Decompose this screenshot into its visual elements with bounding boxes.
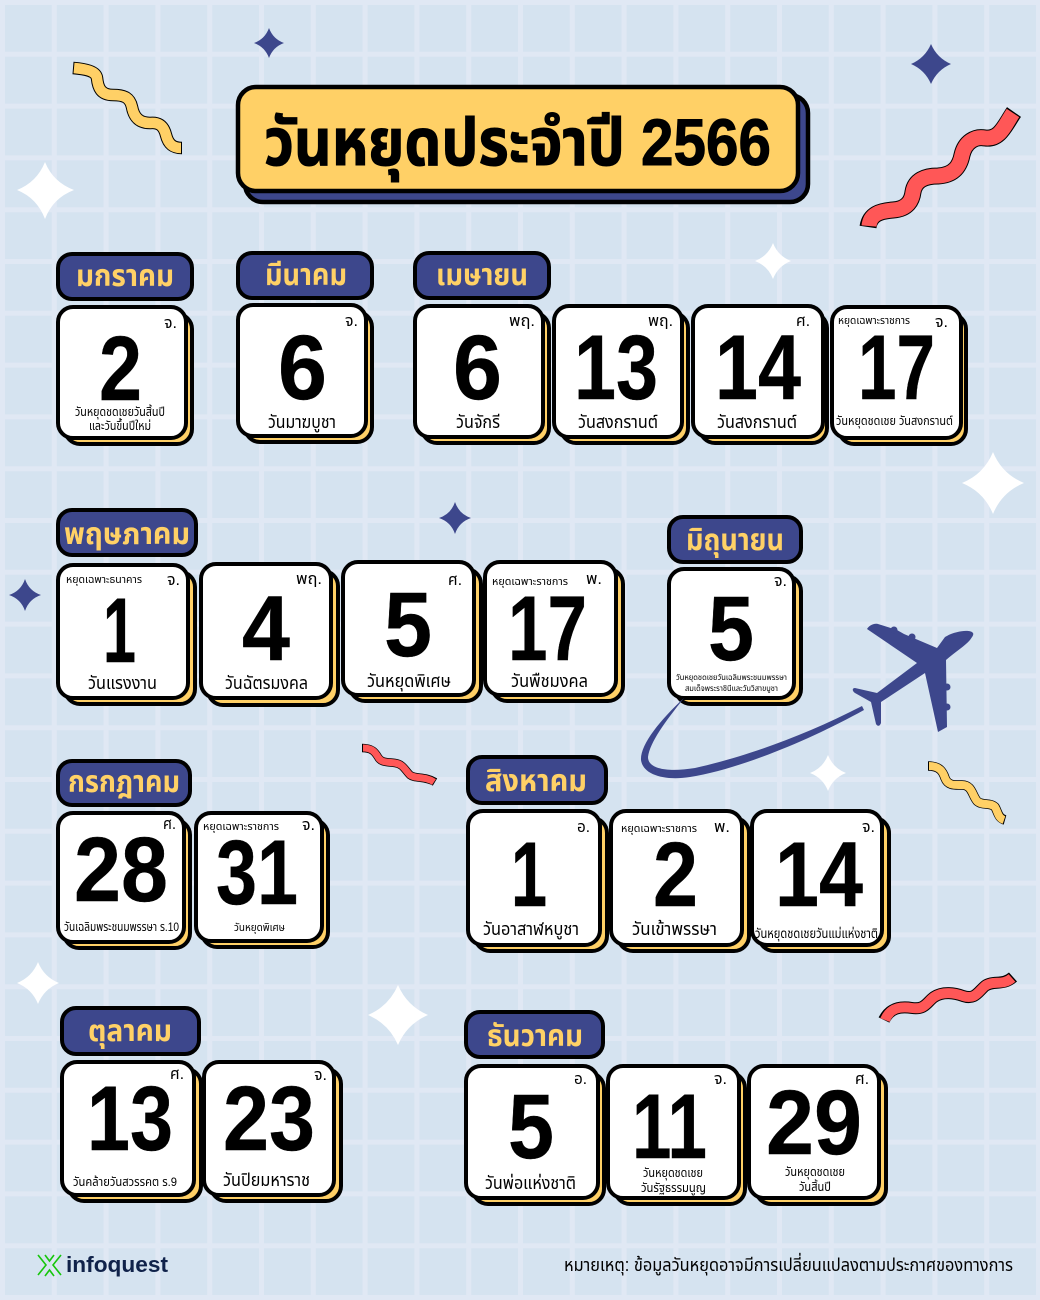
calendar card: 1 August [468, 811, 607, 951]
calendar card: 11 December [608, 1066, 745, 1204]
calendar card: 4 May: พฤ. [296, 571, 322, 588]
calendar card: 29 December: 29 [766, 1072, 862, 1174]
calendar card: 1 May: 1 [103, 580, 136, 682]
calendar card: 17 April: หยุดเฉพาะราชการ [838, 315, 910, 327]
calendar card: 11 December: 11 [632, 1076, 707, 1178]
calendar card: 13 October [62, 1062, 201, 1201]
calendar card: 14 August: วันหยุดชดเชยวันแม่แห่งชาติ [755, 926, 878, 941]
icon: white sparkle below plane [810, 755, 846, 791]
month label: เมษายน: เมษายน [436, 259, 528, 292]
calendar card: 11 December: วันหยุดชดเชย [643, 1166, 703, 1180]
calendar card: 31 July: วันหยุดพิเศษ [234, 922, 285, 934]
calendar card: 6 March: จ. [345, 313, 358, 330]
calendar card: 1 August: วันอาสาฬหบูชา [483, 919, 579, 941]
calendar card: 5 December: 5 [508, 1076, 554, 1178]
calendar card: 28 July: 28 [74, 819, 168, 921]
calendar card: 1 August: 1 [511, 824, 547, 926]
calendar card: 14 August: 14 [775, 824, 863, 926]
calendar card: 28 July: ศ. [163, 816, 176, 833]
calendar card: 17 May: หยุดเฉพาะราชการ [492, 576, 568, 588]
calendar card: 13 October: 13 [87, 1068, 173, 1170]
calendar card: 5 May: 5 [384, 574, 432, 676]
icon: plane flight trail [641, 698, 864, 778]
month label: มกราคม: มกราคม [76, 260, 174, 293]
calendar card: 1 May [58, 565, 195, 704]
month label: กรกฎาคม [58, 761, 190, 805]
icon: navy sparkle left [9, 579, 41, 611]
calendar card: 4 May: 4 [242, 578, 290, 680]
calendar card: 13 April: พฤ. [648, 313, 673, 330]
calendar card: 17 April: 17 [858, 317, 935, 419]
calendar card: 13 April [554, 306, 688, 443]
calendar card: 28 July: วันเฉลิมพระชนมพรรษา ร.10 [64, 920, 179, 934]
title: วันหยุดประจำปี 2566 [264, 105, 771, 182]
month label: ตุลาคม [62, 1008, 199, 1054]
calendar card: 11 December: จ. [714, 1071, 727, 1088]
logo: infoquest: infoquest [66, 1252, 169, 1277]
calendar card: 31 July: หยุดเฉพาะราชการ [203, 821, 279, 833]
calendar card: 14 April: วันสงกรานต์ [717, 412, 797, 432]
calendar card: 29 December: วันสิ้นปี [799, 1179, 831, 1194]
icon: white sparkle lower centre [368, 985, 428, 1045]
calendar card: 6 March: 6 [278, 317, 327, 419]
icon: navy sparkle centre [439, 502, 471, 534]
month label: กรกฎาคม: กรกฎาคม [68, 766, 180, 799]
icon: navy sparkle top right [911, 44, 951, 84]
month label: มีนาคม: มีนาคม [265, 259, 347, 292]
calendar card: 1 May: จ. [167, 572, 180, 589]
calendar card: 5 June: 5 [708, 578, 754, 680]
panel: มกราคม [58, 254, 192, 444]
calendar card: 13 October: วันคล้ายวันสวรรคต ร.9 [73, 1175, 177, 1189]
calendar card: 23 October [204, 1062, 341, 1201]
calendar card: 2 August: พ. [714, 819, 730, 836]
calendar card: 6 April: 6 [453, 317, 502, 419]
icon: small yellow squiggle [928, 766, 1005, 820]
panel: กรกฎาคม [58, 761, 328, 948]
month label: เมษายน [415, 253, 549, 298]
calendar card: 23 October: 23 [223, 1068, 315, 1170]
calendar card: 31 July: 31 [216, 822, 298, 924]
month label: ธันวาคม: ธันวาคม [487, 1020, 583, 1053]
month label: พฤษภาคม: พฤษภาคม [64, 518, 190, 551]
calendar card: 23 October: วันปิยมหาราช [223, 1170, 310, 1190]
icon: white sparkle centre top [755, 243, 791, 279]
calendar card: 14 April [693, 306, 827, 443]
calendar card: 14 August: จ. [862, 819, 875, 836]
calendar card: 2 January: และวันขึ้นปีใหม่ [89, 417, 151, 433]
icon: red squiggle lower right [884, 977, 1013, 1020]
calendar card: 4 May: วันฉัตรมงคล [225, 673, 308, 693]
calendar card: 5 June: จ. [774, 573, 787, 590]
calendar card: 2 January: จ. [164, 315, 177, 332]
calendar card: 14 August [752, 811, 889, 951]
title [238, 87, 808, 202]
calendar card: 6 April: พฤ. [509, 313, 535, 330]
icon: plane [853, 624, 973, 732]
calendar card: 17 April: วันหยุดชดเชย วันสงกรานต์ [836, 414, 953, 428]
month label: มิถุนายน: มิถุนายน [686, 524, 784, 558]
calendar card: 5 May [343, 562, 481, 701]
calendar card: 28 July [58, 813, 190, 948]
calendar card: 17 April [832, 307, 966, 444]
calendar card: 5 June: วันหยุดชดเชยวันเฉลิมพระชนมพรรษา [676, 673, 787, 682]
calendar card: 13 October: ศ. [170, 1066, 184, 1083]
calendar card: 5 December: อ. [574, 1071, 587, 1088]
panel: ตุลาคม [62, 1008, 341, 1201]
calendar card: 17 April: จ. [935, 314, 948, 331]
icon: yellow squiggle top left [73, 68, 182, 148]
month label: มกราคม [58, 254, 192, 299]
calendar card: 17 May [485, 562, 623, 701]
calendar card: 2 January [58, 307, 192, 444]
month label: มีนาคม [238, 253, 372, 298]
month label: มิถุนายน [669, 517, 801, 562]
calendar card: 5 December [466, 1066, 604, 1204]
icon: small red squiggle [362, 748, 435, 782]
calendar card: 13 April: 13 [574, 317, 658, 419]
month label: สิงหาคม: สิงหาคม [485, 765, 587, 798]
calendar card: 5 June [669, 569, 801, 704]
calendar card: 13 April: วันสงกรานต์ [578, 412, 658, 432]
panel: มิถุนายน [669, 517, 801, 704]
calendar card: 14 April: ศ. [796, 313, 810, 330]
calendar card: 31 July [196, 813, 328, 947]
calendar card: 4 May [201, 564, 338, 705]
calendar card: 5 May: ศ. [448, 572, 462, 589]
month label: ธันวาคม [466, 1012, 603, 1057]
calendar card: 2 August: วันเข้าพรรษา [632, 919, 717, 939]
calendar card: 29 December: ศ. [855, 1071, 869, 1088]
calendar card: 6 April: วันจักรี [456, 412, 500, 432]
panel: ธันวาคม [466, 1012, 886, 1204]
month label: ตุลาคม: ตุลาคม [88, 1015, 172, 1049]
calendar card: 23 October: จ. [314, 1067, 327, 1084]
calendar card: 5 May: วันหยุดพิเศษ [367, 671, 451, 692]
calendar card: 1 May: หยุดเฉพาะธนาคาร [66, 574, 142, 586]
calendar card: 6 April [415, 306, 549, 443]
calendar card: 5 December: วันพ่อแห่งชาติ [485, 1173, 576, 1193]
icon: red squiggle top right [868, 112, 1014, 227]
icon: white sparkle lower left [17, 962, 59, 1004]
panel: มีนาคม [238, 253, 372, 442]
calendar card: 17 May: วันพืชมงคล [511, 671, 588, 691]
calendar card: 2 August: หยุดเฉพาะราชการ [621, 823, 697, 835]
calendar card: 1 August: อ. [577, 819, 590, 836]
icon: white sparkle left [17, 162, 74, 219]
icon: navy sparkle top [254, 28, 284, 58]
panel: เมษายน [415, 253, 966, 444]
panel: สิงหาคม [468, 757, 889, 951]
calendar card: 6 March: วันมาฆบูชา [268, 412, 336, 434]
calendar card: 29 December [749, 1066, 886, 1204]
panel: พฤษภาคม [58, 510, 623, 705]
icon: infoquest mark [38, 1255, 61, 1276]
calendar card: 2 January: 2 [99, 318, 142, 420]
calendar card: 2 August [611, 811, 749, 951]
calendar card: 31 July: จ. [302, 817, 315, 834]
calendar card: 1 May: วันแรงงาน [88, 673, 157, 693]
calendar card: 2 January: วันหยุดชดเชยวันสิ้นปี [75, 404, 165, 419]
calendar card: 17 May: 17 [508, 578, 587, 680]
month label: สิงหาคม [468, 757, 606, 803]
calendar card: 5 June: สมเด็จพระราชินีและวันวิสาขบูชา [685, 683, 778, 694]
calendar card: 2 August: 2 [653, 824, 698, 926]
icon: white sparkle right [962, 452, 1024, 514]
calendar card: 29 December: วันหยุดชดเชย [785, 1165, 845, 1179]
calendar card: 17 May: พ. [586, 571, 602, 588]
calendar card: 14 April: 14 [715, 317, 801, 419]
calendar card: 6 March [238, 305, 372, 442]
calendar card: 11 December: วันรัฐธรรมนูญ [641, 1181, 706, 1195]
